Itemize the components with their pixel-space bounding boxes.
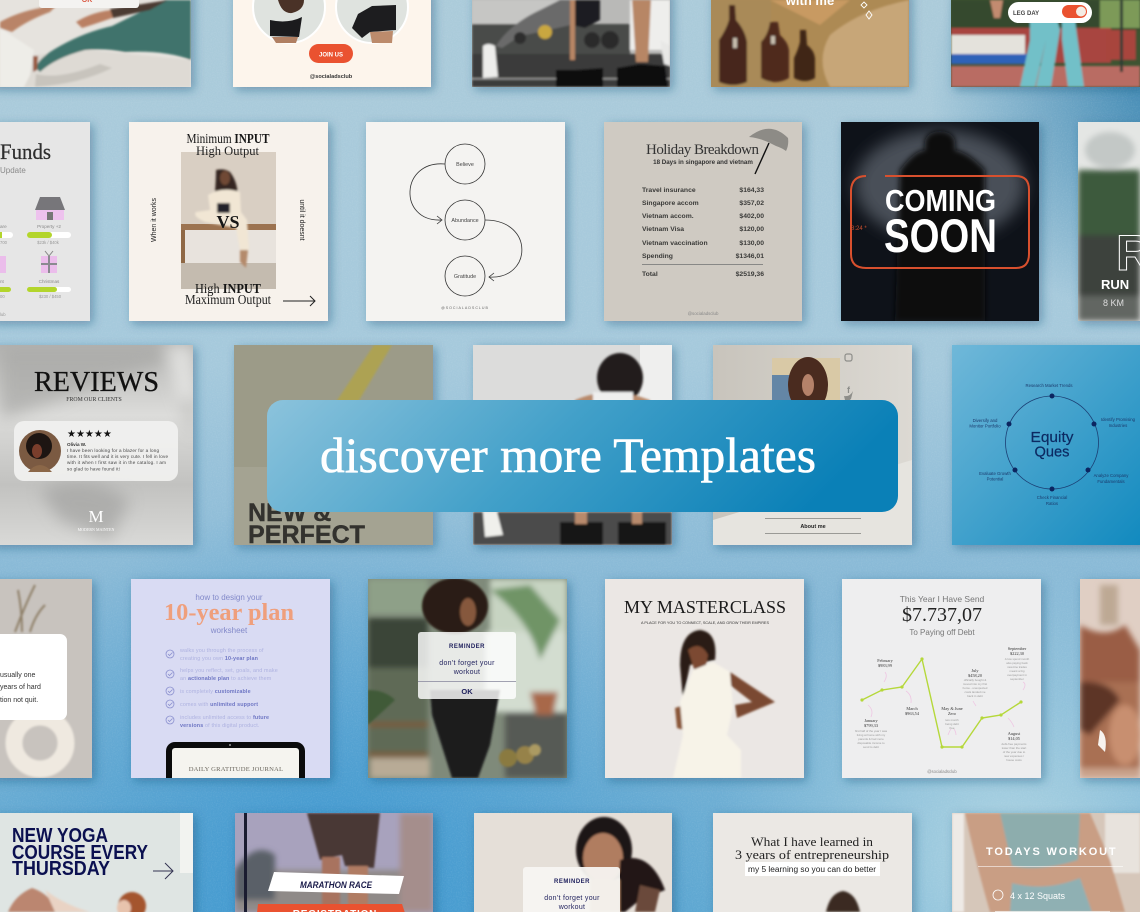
expense table: Travel insurance	[642, 187, 696, 194]
month notes: A low spend month	[1005, 657, 1030, 661]
handle: @SOCIALADSCLUB	[441, 306, 489, 310]
left column fragments: nt	[0, 279, 5, 284]
card: reviews: FROM OUR CLIENTS	[66, 397, 122, 403]
center title: Ques	[1034, 444, 1070, 460]
month notes: living at home with my	[857, 733, 886, 737]
exercise row: 4 x 12 Squats	[1010, 891, 1065, 901]
cycle labels: Industries	[1109, 423, 1127, 428]
month labels: Zero	[948, 711, 956, 716]
cycle labels: Analyze Company	[1094, 473, 1129, 478]
heading: 3 years of entrepreneurship	[735, 847, 889, 862]
card: join us	[233, 0, 431, 87]
headline: To Paying off Debt	[909, 628, 975, 637]
run label: RUN	[1101, 277, 1129, 292]
photo: hair	[826, 891, 860, 912]
left column fragments: lub	[0, 312, 6, 317]
icon: sparkles	[861, 2, 872, 19]
headline: This Year I Have Send	[900, 594, 985, 604]
christmas savings bar: Christmas	[39, 279, 60, 284]
heading: REVIEWS	[34, 367, 159, 398]
month labels: January	[864, 718, 879, 723]
card: my masterclass	[605, 579, 804, 778]
quote note: tion not quit.	[0, 697, 38, 704]
month labels: July	[971, 668, 979, 673]
banner: discover more templates: discover more Templates	[320, 427, 816, 483]
card: funds update	[0, 122, 90, 321]
month notes: september	[1010, 677, 1024, 681]
property savings bar: Property +2	[37, 224, 61, 229]
checklist copy: comes with unlimited support	[180, 702, 258, 708]
exercise row	[993, 890, 1110, 912]
cycle labels: Check Financial	[1037, 495, 1067, 500]
reviewer: Olivia W.	[67, 442, 86, 447]
month notes: of the year due to	[1003, 750, 1026, 754]
left column fragments: 700	[0, 240, 8, 245]
expense table: Vietnam accom.	[642, 213, 694, 220]
expense table: $120,00	[739, 226, 764, 233]
card: debt payoff line chart	[842, 579, 1041, 778]
month notes: overpayment in	[1007, 673, 1027, 677]
arrow	[153, 863, 173, 879]
month notes: lower than the start	[1002, 746, 1026, 750]
leg day toggle pill: LEG DAY	[1013, 11, 1039, 17]
stars: ★★★★★	[67, 429, 112, 440]
heading: Holiday Breakdown	[646, 142, 760, 158]
expense table: Total	[642, 271, 658, 278]
card: equity ques	[952, 345, 1140, 545]
card: believe abundance gratitude diagram	[366, 122, 565, 321]
card: woman with dumbbells	[473, 345, 672, 545]
heading: worksheet	[210, 626, 248, 635]
month labels	[864, 646, 1027, 742]
expense table: $357,02	[739, 200, 764, 207]
cycle labels: Evaluate Growth	[979, 471, 1011, 476]
month notes: disposable income to	[857, 741, 885, 745]
join us button: JOIN US	[319, 52, 343, 58]
silhouette	[895, 131, 985, 321]
headline: $7.737,07	[902, 604, 982, 626]
side text right: until it doesnt	[298, 199, 305, 241]
month labels: May & June	[941, 706, 963, 711]
menu links: About me	[800, 524, 826, 530]
month notes: officially bought &	[964, 678, 986, 682]
popup fragment	[39, 0, 139, 8]
month labels: $14,05	[1008, 736, 1020, 742]
month notes: back in debt	[967, 694, 983, 698]
line chart	[860, 657, 1023, 749]
card: funds update: Update	[0, 166, 26, 175]
review copy: with it when I first saw it in the catalog. I am	[67, 460, 166, 465]
reminder popup	[523, 867, 620, 912]
expense table: $402,00	[739, 213, 764, 220]
cycle labels: Monitor Portfolio	[969, 424, 1001, 428]
expense table: Vietnam vaccination	[642, 240, 708, 247]
card: stretching leg photo	[0, 0, 191, 87]
heading bottom	[185, 281, 271, 307]
month labels: $983,99	[878, 663, 892, 669]
heading	[164, 593, 294, 635]
month labels: $458,20	[968, 673, 982, 679]
month labels: August	[1008, 731, 1021, 736]
logo: M	[88, 507, 104, 526]
registration band	[256, 904, 408, 912]
pink pointers	[868, 672, 1025, 735]
month labels: March	[906, 706, 918, 711]
expense table: $130,00	[739, 240, 764, 247]
christmas savings bar	[27, 279, 71, 299]
diagram labels: Abundance	[451, 218, 479, 224]
cycle diagram	[1006, 394, 1098, 492]
expense table: $1346,01	[736, 253, 764, 260]
headline: NEW YOGA	[12, 825, 108, 847]
headline: THURSDAY	[12, 858, 111, 880]
card: new and perfect	[234, 345, 433, 549]
handle: @socialadsclub	[927, 769, 957, 774]
month labels: $799,33	[864, 723, 878, 729]
heading top: High Output	[196, 143, 259, 158]
cycle labels: Ratios	[1046, 501, 1058, 506]
heading: What I have learned in	[751, 834, 874, 849]
banner: discover more templates	[267, 400, 898, 512]
headline	[248, 499, 365, 549]
checklist copy: an actionable plan to achieve them	[180, 676, 272, 682]
checklist copy	[179, 648, 278, 729]
card: holiday breakdown	[604, 122, 802, 321]
handle: @socialadsclub	[310, 74, 353, 80]
reminder popup: don't forget your	[544, 895, 600, 902]
month notes: new-line trades	[1007, 665, 1027, 669]
month labels: February	[877, 658, 894, 663]
cycle circles	[445, 144, 485, 296]
reminder popup: OK	[461, 687, 473, 696]
month notes: costs landed me	[964, 690, 986, 694]
handle: @socialadsclub	[688, 311, 719, 316]
headline: NEW &	[248, 499, 331, 527]
photo: yoga pose	[8, 888, 146, 912]
arrow	[283, 296, 315, 306]
cycle labels: Potential	[987, 476, 1003, 482]
reminder popup: REMINDER	[449, 644, 485, 650]
headline	[884, 183, 997, 262]
card: todays workout	[952, 813, 1140, 912]
center title: Equity	[1030, 430, 1074, 446]
checklist copy: versions of this digital product.	[180, 723, 260, 729]
curved arrow left	[410, 164, 445, 224]
subheading	[745, 862, 880, 876]
tablet mockup	[166, 742, 305, 792]
quote note	[0, 634, 67, 720]
checklist copy: includes unlimited access to future	[180, 715, 269, 721]
heading: Funds	[0, 139, 51, 164]
card: new yoga course	[0, 813, 193, 912]
month notes: two month	[945, 718, 959, 722]
diagram labels: Believe	[456, 162, 474, 168]
icon: house	[35, 197, 65, 220]
month notes: parents & had more	[858, 737, 884, 741]
expense table	[642, 187, 764, 278]
reminder popup	[418, 632, 516, 699]
month notes: also paying back	[1006, 661, 1028, 665]
month notes: moved into my first	[963, 682, 987, 686]
heading: 10-year plan	[164, 600, 294, 626]
card: reviews	[0, 345, 193, 545]
month notes: new expenses /	[1004, 754, 1024, 758]
card: holiday breakdown: 18 Days in singapore and vietnam	[653, 159, 753, 166]
portrait circles	[253, 0, 408, 43]
month labels: September	[1008, 646, 1027, 651]
review copy: time. It fits well and it is very cute. I fell in love	[67, 454, 168, 459]
social icons: f	[847, 385, 851, 395]
card: reminder smiling woman	[474, 813, 672, 912]
heading: MY MASTERCLASS	[624, 597, 786, 617]
reminder popup: REMINDER	[554, 879, 590, 885]
card: entrepreneurship learnings	[713, 813, 912, 912]
side text left: When it works	[151, 198, 158, 242]
card: leg day running track	[951, 0, 1140, 87]
social icons	[844, 354, 853, 401]
review copy	[67, 448, 168, 472]
card: dumbbell workout photo top	[472, 0, 670, 87]
month notes: meant a big	[1009, 669, 1025, 673]
month notes: debt-free payments	[1002, 742, 1027, 746]
headline	[900, 594, 985, 637]
property savings bar: $23k / $40k	[37, 240, 60, 245]
card: 10-year plan	[131, 579, 330, 792]
checklist copy: is completely customizable	[180, 689, 251, 695]
month labels: $222,30	[1010, 651, 1024, 657]
race label: MARATHON RACE	[300, 880, 373, 891]
expense table: $164,33	[739, 187, 764, 194]
photo	[772, 357, 840, 413]
vs label: VS	[216, 212, 240, 232]
tablet mockup: DAILY GRATITUDE JOURNAL	[189, 766, 283, 773]
photo: woman on bench	[181, 152, 276, 289]
icon: umbrella	[749, 129, 788, 174]
reminder popup: workout	[558, 904, 585, 911]
reminder popup: don't forget your	[439, 660, 495, 667]
heading: how to design your	[195, 593, 263, 602]
checklist copy: creating you own 10-year plan	[180, 656, 258, 662]
expense table: $2519,36	[736, 271, 764, 278]
avatar	[19, 430, 61, 472]
quote note: years of hard	[0, 684, 41, 691]
icon: gift	[41, 251, 57, 273]
leg day toggle pill	[1008, 2, 1092, 23]
review copy: so glad to have found it!	[67, 466, 120, 472]
christmas savings bar: $230 / $450	[39, 294, 62, 299]
card: minimum input vs maximum output	[129, 122, 328, 321]
race label	[268, 872, 404, 894]
month notes: being debt	[945, 722, 959, 726]
card: quote with ceramic ring	[0, 579, 92, 778]
cycle labels: Fundamentals	[1097, 479, 1125, 484]
photo: woman in white	[673, 630, 775, 778]
left column fragments	[0, 224, 13, 317]
card: skincare photos	[1080, 579, 1140, 778]
reminder popup: workout	[453, 669, 480, 676]
curved arrow right	[485, 220, 522, 281]
cycle labels: Research Market Trends	[1025, 383, 1073, 388]
diagram labels: Gratitude	[454, 274, 476, 280]
subheading: my 5 learning so you can do better	[748, 865, 876, 874]
heading top	[186, 131, 270, 158]
cycle labels	[969, 383, 1136, 506]
checklist copy: walks you through the process of	[179, 648, 264, 654]
join us button	[309, 44, 353, 63]
review card	[14, 421, 178, 481]
checklist icons	[166, 650, 174, 724]
card: about me	[713, 345, 912, 545]
headline: PERFECT	[248, 521, 365, 549]
heading bottom: Maximum Output	[185, 292, 271, 307]
card: amber bottles	[711, 0, 909, 87]
cycle labels: Identify Promising	[1101, 417, 1136, 422]
left column fragments: 00	[0, 294, 5, 299]
heading	[735, 834, 889, 862]
card: marathon race	[235, 813, 433, 912]
checklist copy: helps you reflect, set, goals, and make	[180, 668, 278, 674]
diagram labels	[451, 162, 479, 280]
card: run 8 km: 8 KM	[1103, 298, 1124, 308]
headline: SOON	[884, 209, 997, 262]
card: my masterclass: A PLACE FOR YOU TO CONNECT, SCALE, AND GROW THEIR EMPIRES	[641, 621, 769, 625]
month notes: send to debt	[863, 745, 879, 749]
cycle labels: Diversify and	[973, 418, 998, 423]
logo	[78, 507, 114, 532]
month notes: house costs	[1006, 758, 1022, 762]
card: coming soon	[841, 122, 1039, 321]
expense table: Vietnam Visa	[642, 226, 684, 233]
month notes: home - unexpected	[963, 686, 988, 690]
heading bottom: High INPUT	[195, 281, 261, 296]
month labels: $963,54	[905, 711, 920, 717]
property savings bar	[27, 224, 71, 245]
headline: COURSE EVERY	[12, 842, 149, 864]
workout title: TODAYS WORKOUT	[986, 846, 1118, 858]
neon frame	[851, 176, 1029, 268]
logo: MODERN MAINTEN	[78, 527, 114, 532]
card: reminder with plants	[368, 578, 567, 778]
quote note: usually one	[0, 672, 36, 679]
headline	[12, 825, 149, 880]
menu links	[765, 518, 861, 534]
month notes	[855, 657, 1030, 762]
center title	[1030, 430, 1074, 460]
card: run 8 km	[1078, 122, 1140, 321]
expense table: Singapore accom	[642, 200, 699, 207]
gold stroke	[336, 345, 392, 402]
headline: COMING	[885, 183, 996, 218]
neon small label: 8:24 *	[851, 226, 867, 232]
left column fragments: are	[0, 224, 7, 229]
expense table: Spending	[642, 253, 673, 260]
heading top: Minimum INPUT	[186, 131, 270, 146]
month notes: first half of the year I was	[855, 729, 888, 733]
month notes: free	[950, 726, 955, 730]
review copy: I have been looking for a blazer for a long	[67, 448, 159, 453]
